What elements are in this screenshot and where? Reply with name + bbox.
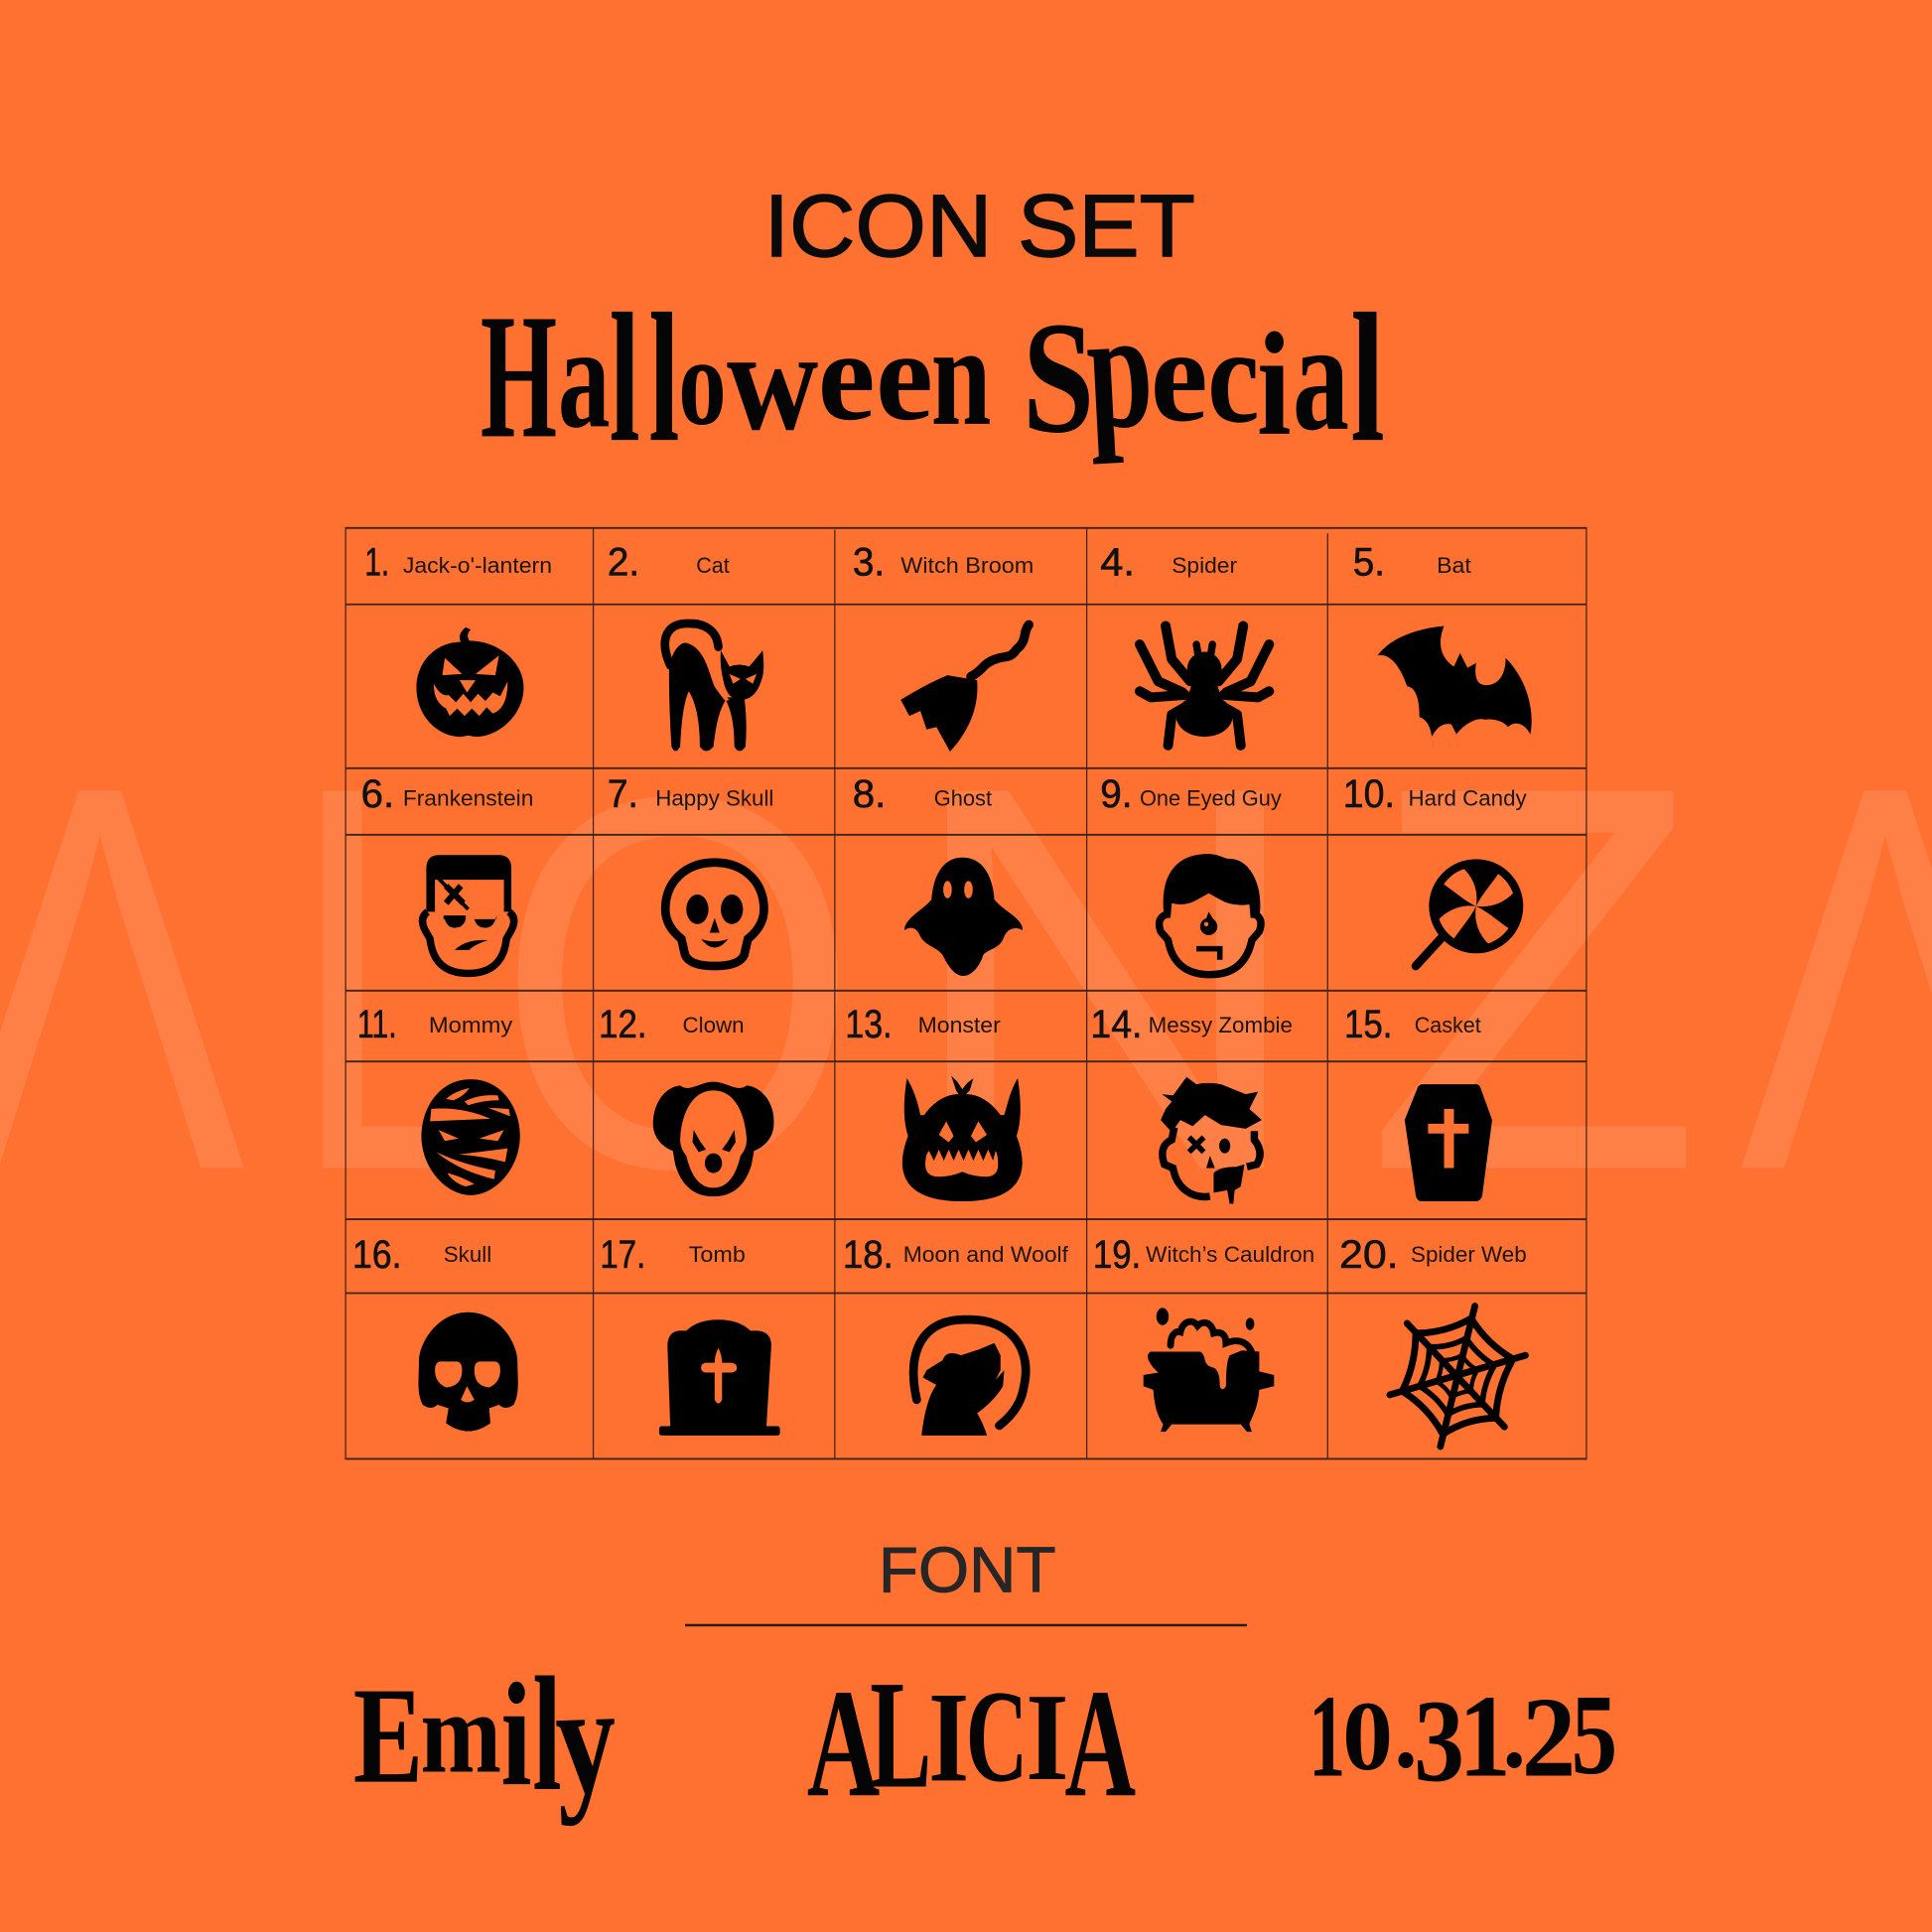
font sample: ALICIA: L xyxy=(870,1648,931,1821)
cell labels: 14. xyxy=(1090,1003,1142,1046)
heading: Halloween Special: H xyxy=(481,279,557,476)
cell labels: Casket xyxy=(1415,1013,1482,1037)
heading: Halloween Special: e xyxy=(876,306,933,448)
icon: skull xyxy=(418,1312,518,1432)
icon: one eyed guy xyxy=(1160,854,1261,975)
icon: spider web xyxy=(1390,1307,1525,1447)
font sample: date: 1 xyxy=(1458,1672,1511,1802)
cell labels: 4. xyxy=(1100,541,1135,585)
cell labels: Witch Broom xyxy=(900,553,1034,578)
cell labels: 15. xyxy=(1344,1003,1392,1046)
cell labels: 17. xyxy=(600,1233,645,1277)
icon: moon and wolf xyxy=(913,1319,1026,1436)
font sample: date: 0 xyxy=(1342,1681,1393,1791)
font sample: ALICIA: I xyxy=(928,1665,969,1809)
font sample: Emily: m xyxy=(420,1670,501,1798)
cell labels: 5. xyxy=(1353,541,1385,585)
cell labels: 6. xyxy=(361,772,394,816)
cell labels: 13. xyxy=(845,1003,893,1046)
cell labels: Jack-o'-lantern xyxy=(403,553,552,578)
icon: witch's cauldron xyxy=(1144,1308,1274,1432)
font sample: date: 2 xyxy=(1522,1675,1576,1801)
cell labels: Frankenstein xyxy=(403,786,533,811)
font sample: ALICIA: C xyxy=(966,1664,1028,1810)
icon: ghost xyxy=(904,858,1023,976)
icon: clown xyxy=(653,1082,773,1196)
heading: Halloween Special: a xyxy=(558,296,611,459)
cell labels: Bat xyxy=(1437,553,1472,578)
cell labels: Mommy xyxy=(429,1013,513,1037)
icon: mummy xyxy=(421,1079,520,1195)
divider line xyxy=(685,1624,1247,1626)
font sample: Emily xyxy=(353,1643,620,1827)
heading: Halloween Special: c xyxy=(1207,300,1259,451)
font sample: date: 1 xyxy=(1309,1671,1345,1802)
font sample: ALICIA: A xyxy=(807,1656,880,1830)
cell labels: Spider xyxy=(1172,553,1238,578)
cell labels: 11. xyxy=(357,1003,397,1046)
font sample: date: 5 xyxy=(1572,1672,1617,1798)
cell labels: Moon and Woolf xyxy=(903,1242,1069,1267)
icon: bat xyxy=(1378,625,1532,737)
font sample: Emily: y xyxy=(553,1653,620,1827)
cell labels: 19. xyxy=(1093,1233,1141,1277)
heading: Halloween Special: a xyxy=(1293,289,1349,463)
cell labels: Ghost xyxy=(934,786,993,811)
heading: Halloween Special xyxy=(481,273,1385,481)
heading: Halloween Special: e xyxy=(1151,302,1208,450)
icon: cat xyxy=(665,623,763,751)
font sample: date xyxy=(1309,1671,1617,1806)
font sample: ALICIA: I xyxy=(1026,1668,1069,1807)
cell labels: Monster xyxy=(918,1013,1001,1037)
cell labels: Messy Zombie xyxy=(1149,1013,1293,1037)
cell labels: Skull xyxy=(444,1242,491,1267)
font sample: date: . xyxy=(1503,1679,1526,1788)
cell labels: Hard Candy xyxy=(1409,786,1528,811)
heading: Halloween Special: S xyxy=(1023,288,1094,467)
font sample: Emily: l xyxy=(532,1643,562,1825)
cell labels: Happy Skull xyxy=(655,786,773,811)
icon: spider xyxy=(1140,625,1269,746)
heading: Halloween Special: w xyxy=(727,300,819,461)
heading: Halloween Special: i xyxy=(1257,302,1292,466)
watermark: N xyxy=(900,673,1310,1286)
heading: Halloween Special: l xyxy=(610,276,640,481)
cell labels: Tomb xyxy=(689,1242,746,1267)
heading: Halloween Special: l xyxy=(1350,276,1385,481)
icon: messy zombie xyxy=(1161,1077,1262,1204)
cell labels: Cat xyxy=(696,553,730,578)
icon table xyxy=(345,527,1587,1458)
cell labels: 20. xyxy=(1339,1233,1399,1277)
icon: hard candy xyxy=(1416,863,1519,966)
cell labels: 16. xyxy=(352,1233,402,1277)
font sample: ALICIA: A xyxy=(1064,1658,1136,1830)
cell labels: 18. xyxy=(843,1233,894,1277)
cell labels: Clown xyxy=(683,1013,745,1037)
cell labels: 1. xyxy=(364,541,389,585)
font sample: Emily: i xyxy=(500,1654,532,1817)
font sample: date: . xyxy=(1394,1679,1418,1788)
cell labels xyxy=(352,541,1528,1277)
cell labels: 7. xyxy=(608,772,638,816)
cell labels: 12. xyxy=(599,1003,647,1046)
icon: tomb xyxy=(659,1319,780,1436)
cell labels: 3. xyxy=(853,541,885,585)
watermark: L xyxy=(288,673,521,1286)
font sample: ALICIA xyxy=(807,1648,1136,1830)
icon: frankenstein xyxy=(423,855,514,973)
heading: Halloween Special: l xyxy=(648,276,679,481)
icon: casket xyxy=(1405,1084,1492,1201)
heading: Halloween Special: o xyxy=(678,314,727,452)
watermark xyxy=(0,671,1932,1286)
heading: Halloween Special: p xyxy=(1082,273,1157,465)
heading: Halloween Special: e xyxy=(818,306,876,448)
watermark: O xyxy=(495,686,860,1278)
watermark: Z xyxy=(1365,671,1704,1285)
table grid xyxy=(345,527,1587,1458)
font sample: Emily: E xyxy=(353,1659,423,1812)
cell labels: 9. xyxy=(1100,772,1133,816)
heading: font: FONT xyxy=(879,1534,1056,1605)
cell labels: One Eyed Guy xyxy=(1140,786,1283,811)
cell labels: Spider Web xyxy=(1411,1242,1527,1267)
icon: happy skull xyxy=(665,863,763,966)
cell labels: 10. xyxy=(1343,772,1395,816)
heading: icon set: ICON SET xyxy=(763,176,1195,275)
cell labels: Witch’s Cauldron xyxy=(1146,1242,1314,1267)
icon: pumpkin xyxy=(416,627,523,737)
icon: witch broom xyxy=(900,624,1029,752)
font sample: date: 3 xyxy=(1414,1675,1464,1806)
heading: Halloween Special: n xyxy=(931,296,991,456)
icon: monster xyxy=(902,1075,1023,1201)
cell labels: 8. xyxy=(853,772,886,816)
cell labels: 2. xyxy=(608,541,639,585)
